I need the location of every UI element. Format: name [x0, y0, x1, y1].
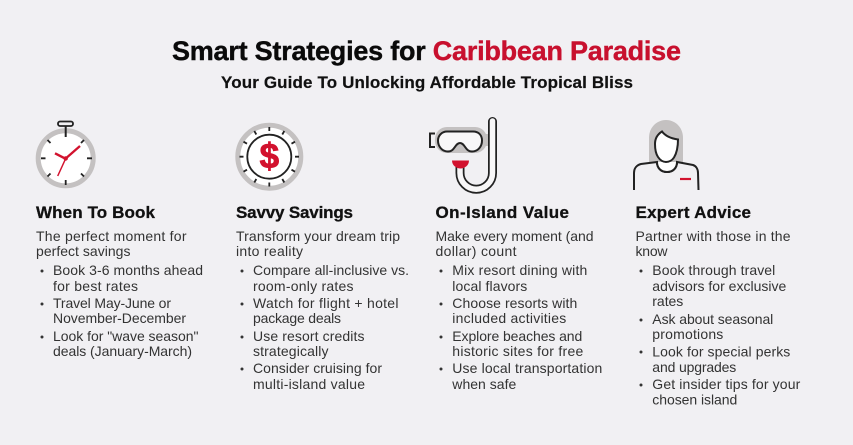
- bullet list: Compare all-inclusive vs.: [253, 262, 409, 278]
- bullet list: package deals: [253, 310, 341, 326]
- intro text: into reality: [236, 243, 303, 259]
- icon: stopwatch: [38, 122, 93, 186]
- heading: On-Island Value: On-Island Value: [436, 203, 569, 222]
- bullet list: [240, 262, 409, 392]
- panel: On-Island Value: [436, 203, 602, 392]
- intro text: know: [636, 243, 668, 259]
- heading: Expert Advice: Expert Advice: [636, 203, 751, 222]
- intro text: [436, 228, 594, 259]
- bullet list: room-only rates: [253, 278, 354, 294]
- heading: When To Book: When To Book: [36, 203, 156, 222]
- bullet list: deals (January-March): [53, 343, 192, 359]
- bullet list: Book through travel: [652, 262, 775, 278]
- intro text: perfect savings: [36, 243, 130, 259]
- bullet list: [40, 262, 203, 359]
- bullet list: promotions: [652, 326, 723, 342]
- subtitle: Your Guide To Unlocking Affordable Tropical Bliss: [221, 73, 633, 92]
- panel: When To Book: [36, 203, 203, 359]
- bullet list: included activities: [452, 310, 566, 326]
- bullet list: for best rates: [53, 278, 138, 294]
- intro text: Transform your dream trip: [236, 228, 400, 244]
- title: Smart Strategies for Caribbean Paradise: [172, 36, 681, 66]
- bullet list: Look for special perks: [652, 344, 790, 360]
- intro text: [236, 228, 400, 259]
- bullet list: Explore beaches and: [452, 328, 582, 344]
- intro text: Partner with those in the: [636, 228, 791, 244]
- bullet list: Book 3-6 months ahead: [53, 262, 203, 278]
- bullet list: advisors for exclusive: [652, 278, 787, 294]
- bullet list: local flavors: [452, 278, 527, 294]
- intro text: The perfect moment for: [36, 228, 187, 244]
- bullet list: strategically: [253, 343, 328, 359]
- icon: dollar coin: [238, 125, 301, 188]
- bullet list: multi-island value: [253, 376, 365, 392]
- intro text: Make every moment (and: [436, 228, 594, 244]
- bullet list: rates: [652, 293, 683, 309]
- bullet list: Use local transportation: [452, 360, 602, 376]
- bullet list: November-December: [53, 310, 186, 326]
- bullet list: Ask about seasonal: [652, 311, 773, 327]
- bullet list: Get insider tips for your: [652, 376, 801, 392]
- intro text: [636, 228, 791, 259]
- icon: snorkel mask: [430, 121, 492, 189]
- intro text: dollar) count: [436, 243, 517, 259]
- bullet list: Watch for flight + hotel: [253, 295, 398, 311]
- bullet list: historic sites for free: [452, 343, 584, 359]
- bullet list: when safe: [451, 376, 517, 392]
- bullet list: chosen island: [652, 392, 737, 408]
- icon: dollar coin: $: [260, 137, 279, 176]
- bullet list: Mix resort dining with: [452, 262, 587, 278]
- intro text: [36, 228, 187, 259]
- bullet list: [640, 262, 801, 408]
- bullet list: [440, 262, 602, 392]
- panel: Expert Advice: [636, 203, 801, 408]
- heading: Savvy Savings: Savvy Savings: [236, 203, 353, 222]
- bullet list: Travel May-June or: [53, 295, 171, 311]
- icon: advisor woman: [634, 120, 698, 190]
- bullet list: Look for "wave season": [53, 328, 199, 344]
- bullet list: Use resort credits: [253, 328, 364, 344]
- bullet list: Consider cruising for: [253, 360, 382, 376]
- bullet list: Choose resorts with: [452, 295, 577, 311]
- bullet list: and upgrades: [652, 359, 736, 375]
- panel: Savvy Savings: [236, 203, 409, 392]
